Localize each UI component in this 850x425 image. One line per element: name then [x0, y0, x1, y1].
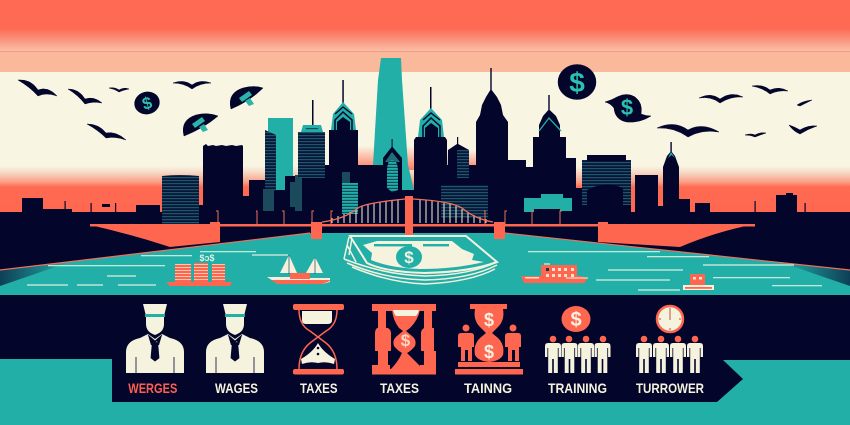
big dark tower	[476, 68, 508, 206]
teal striped block	[342, 183, 358, 214]
icon: officer one	[126, 304, 184, 373]
icon: officer two	[206, 304, 264, 373]
dollar coin with tails: $	[621, 95, 633, 120]
teal towers	[268, 58, 414, 205]
dollar coin with tails	[605, 94, 651, 122]
bird	[745, 133, 766, 137]
hangers	[332, 199, 486, 223]
bridge	[90, 196, 755, 247]
navy silhouette	[0, 68, 850, 240]
left striped block	[162, 175, 199, 224]
cream bill centre	[363, 241, 484, 269]
city base	[162, 205, 631, 240]
money-winged bird	[230, 86, 263, 109]
bird	[699, 94, 743, 103]
capped striped tower	[298, 125, 325, 178]
icon: double bulb hourglass	[455, 304, 523, 374]
small dark tower and link	[447, 137, 469, 206]
large dollar coin: $	[569, 67, 585, 98]
coin barge: $ɔ$	[199, 253, 215, 263]
bird	[87, 124, 126, 140]
coin barge	[166, 253, 232, 286]
label: TAXES one: TAXES	[300, 380, 338, 396]
dark teal low blocks	[263, 172, 350, 211]
tower three	[533, 95, 582, 206]
tower one body and spire	[329, 130, 358, 166]
bill dollar seal: $	[404, 248, 414, 267]
sky background	[0, 0, 850, 216]
right blocks	[635, 175, 658, 212]
label: TRAINING: TRAINING	[548, 380, 607, 396]
striped office block	[582, 155, 631, 206]
icon: double bulb hourglass: $	[484, 342, 494, 362]
label: WAGES: WAGES	[215, 380, 258, 396]
birds and coins, right	[558, 64, 817, 137]
tugboat	[683, 274, 714, 290]
deck and approach ramps	[90, 196, 755, 247]
stacked bill edges	[344, 237, 497, 284]
label: WERGES: WERGES	[128, 380, 177, 396]
banner: teal floor	[0, 359, 850, 425]
icon: coin over team	[545, 306, 610, 373]
skyline	[0, 58, 850, 240]
narrow striped tower	[265, 130, 276, 192]
banner: navy arrow panel	[0, 296, 850, 402]
bird	[752, 86, 788, 94]
central base	[302, 178, 322, 206]
coin bird: $	[140, 93, 155, 114]
small dome tower	[383, 139, 414, 198]
left ground and low buildings	[0, 198, 162, 240]
icon: hourglass	[293, 304, 344, 374]
icon: hourglass with figures: $	[401, 331, 411, 350]
label: TAXES two: TAXES	[380, 380, 419, 396]
tower two body and spire	[414, 137, 447, 206]
cables	[322, 199, 493, 222]
stepped block	[249, 180, 265, 205]
cargo ship	[521, 263, 588, 283]
small striped tower	[457, 150, 469, 178]
birds and flying money, left	[18, 80, 263, 140]
crown chevron, tower three	[539, 118, 561, 131]
river	[0, 233, 850, 295]
teal bill face with cream frame	[350, 236, 497, 273]
lamp posts	[216, 211, 562, 224]
bird	[109, 88, 129, 92]
water ripples	[27, 252, 822, 290]
large dollar coin	[558, 64, 596, 100]
right tower cap	[668, 152, 675, 158]
money stack	[344, 236, 497, 284]
icon: double bulb hourglass: $	[484, 310, 494, 330]
crown, tower two	[418, 108, 444, 138]
crown, tower one	[331, 102, 356, 131]
bird	[789, 125, 817, 134]
bill dollar seal	[396, 246, 422, 268]
wide striped block	[441, 185, 488, 218]
icon: clock over team	[636, 306, 703, 373]
bird	[797, 100, 812, 106]
crenellated tower	[203, 144, 249, 205]
teal billboard	[524, 194, 572, 212]
icon: hourglass with figures	[372, 304, 436, 374]
icon: coin over team: $	[570, 309, 582, 331]
coin bird	[132, 89, 162, 117]
bird	[68, 89, 102, 104]
money-winged bird	[183, 114, 218, 136]
label: TAINNG: TAINNG	[464, 380, 512, 396]
label: TURROWER: TURROWER	[636, 380, 704, 396]
low block	[265, 190, 295, 206]
sailboat	[267, 255, 330, 284]
bird	[18, 80, 57, 96]
bird	[657, 124, 719, 137]
bird	[173, 81, 211, 89]
antenna	[312, 100, 314, 125]
stepped link	[508, 160, 533, 206]
